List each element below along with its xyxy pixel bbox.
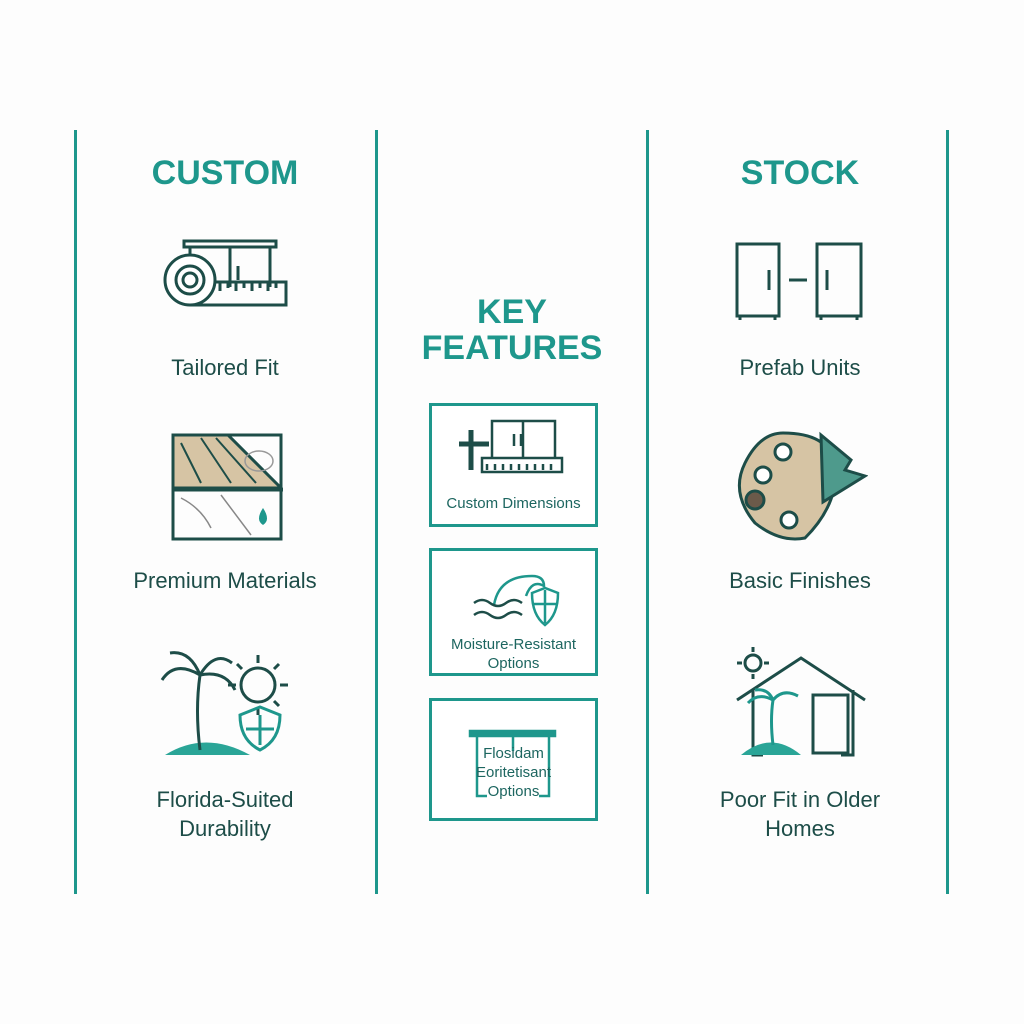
icon: house palm: [736, 647, 866, 756]
title: stock: STOCK: [741, 154, 859, 192]
label: florida durability: [157, 787, 293, 841]
label: premium materials: Premium Materials: [133, 568, 317, 593]
icon: palette: [738, 432, 868, 540]
label: prefab units: Prefab Units: [739, 355, 861, 380]
panel: florida options: Flosidam: [483, 745, 544, 762]
panel: florida options: Eoritetisant: [476, 764, 551, 781]
icon: cabinet ruler: [459, 420, 564, 474]
panel: custom dimensions: [429, 403, 598, 527]
label: tailored fit: Tailored Fit: [171, 355, 279, 380]
icon: materials: [172, 434, 283, 540]
panel: moisture resistant: Options: [488, 655, 539, 672]
panel: moisture resistant: Moisture-Resistant: [451, 636, 576, 653]
label: florida durability: Florida-Suited: [157, 787, 293, 812]
icon: cabinet outline: [468, 730, 556, 798]
icon: wave shield: [473, 574, 560, 627]
label: poor fit: [720, 787, 880, 841]
panel: moisture resistant: [429, 548, 598, 676]
label: florida durability: Durability: [179, 816, 271, 841]
title: key features: [422, 293, 602, 367]
title: key features: KEY: [477, 293, 547, 331]
panel: custom dimensions: Custom Dimensions: [446, 495, 581, 512]
label: poor fit: Homes: [765, 816, 835, 841]
title: key features: FEATURES: [422, 329, 602, 367]
icon: tape measure cabinet: [164, 240, 288, 306]
icon: palm sun shield: [160, 651, 288, 755]
icon: prefab units: [736, 242, 862, 320]
panel: florida options: [429, 698, 598, 821]
title: custom: CUSTOM: [152, 154, 298, 192]
label: poor fit: Poor Fit in Older: [720, 787, 880, 812]
label: basic finishes: Basic Finishes: [729, 568, 871, 593]
panel: florida options: Options: [488, 783, 539, 800]
